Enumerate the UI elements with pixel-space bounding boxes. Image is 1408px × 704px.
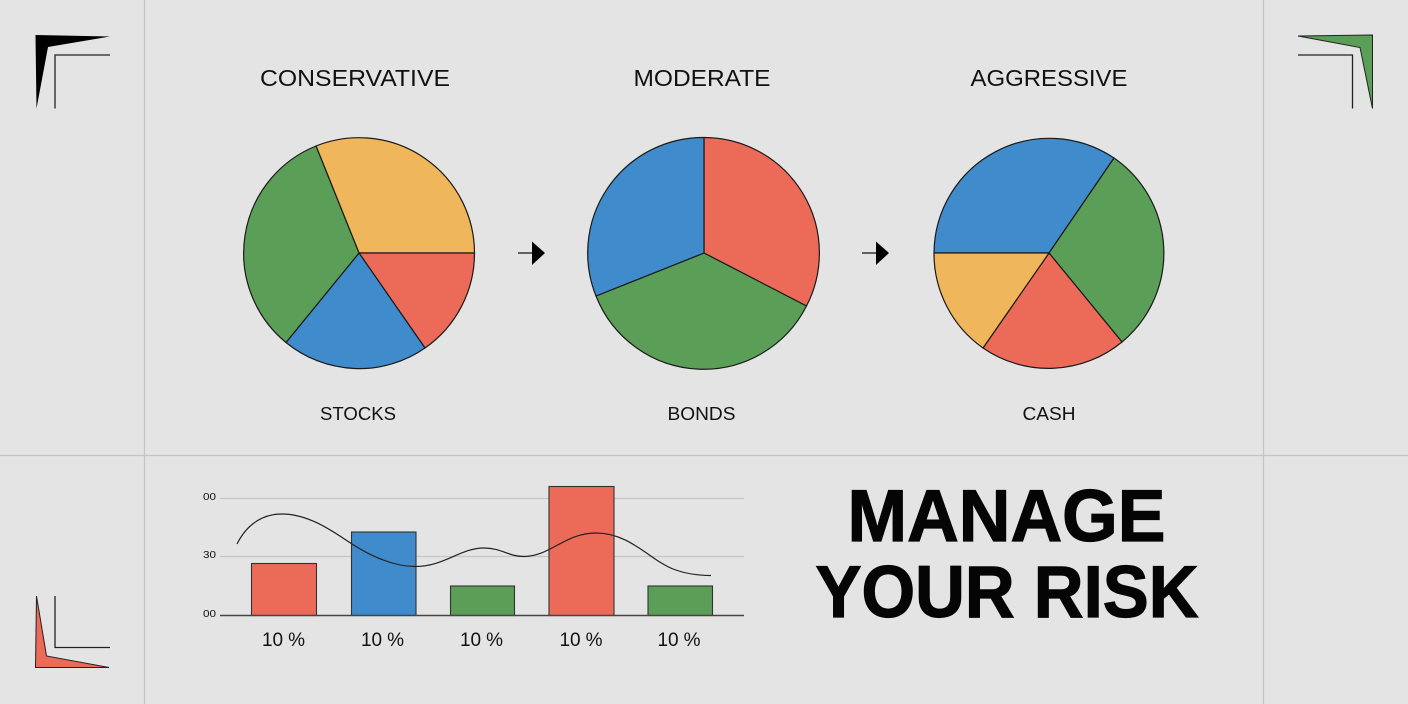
value label 3: 10 % [460,630,503,651]
pie chart: aggressive [934,138,1164,368]
heading: aggressive: AGGRESSIVE [970,65,1128,91]
value label 1: 10 % [262,630,305,651]
icon: bottom-left corner bracket [36,596,110,668]
pie chart: moderate [588,137,819,369]
axis label: top: 00 [203,491,216,503]
heading: conservative: CONSERVATIVE [260,65,450,91]
label: bonds: BONDS [668,403,736,424]
title [816,476,1199,633]
bar: blue [352,532,416,616]
bar: red 1 [252,564,316,616]
axis label: middle: 30 [203,549,216,561]
bar: green 2 [648,586,712,616]
bar: red 2 [549,486,614,616]
title: MANAGE [848,476,1166,557]
value label 2: 10 % [361,630,404,651]
heading: moderate: MODERATE [634,65,770,91]
bar: green 1 [450,586,514,616]
pie chart: conservative [244,138,475,369]
icon: top-left corner bracket [36,35,110,108]
bar and line chart [203,486,744,651]
arrow: conservative to moderate [518,242,545,265]
icon: top-right corner bracket [1298,35,1372,108]
value label 4: 10 % [560,630,603,651]
title: YOUR RISK [816,552,1199,633]
trend line [237,514,711,576]
label: cash: CASH [1022,403,1076,424]
axis label: bottom: 00 [203,608,216,620]
value label 5: 10 % [658,630,701,651]
label: stocks: STOCKS [320,403,396,424]
arrow: moderate to aggressive [862,242,889,265]
